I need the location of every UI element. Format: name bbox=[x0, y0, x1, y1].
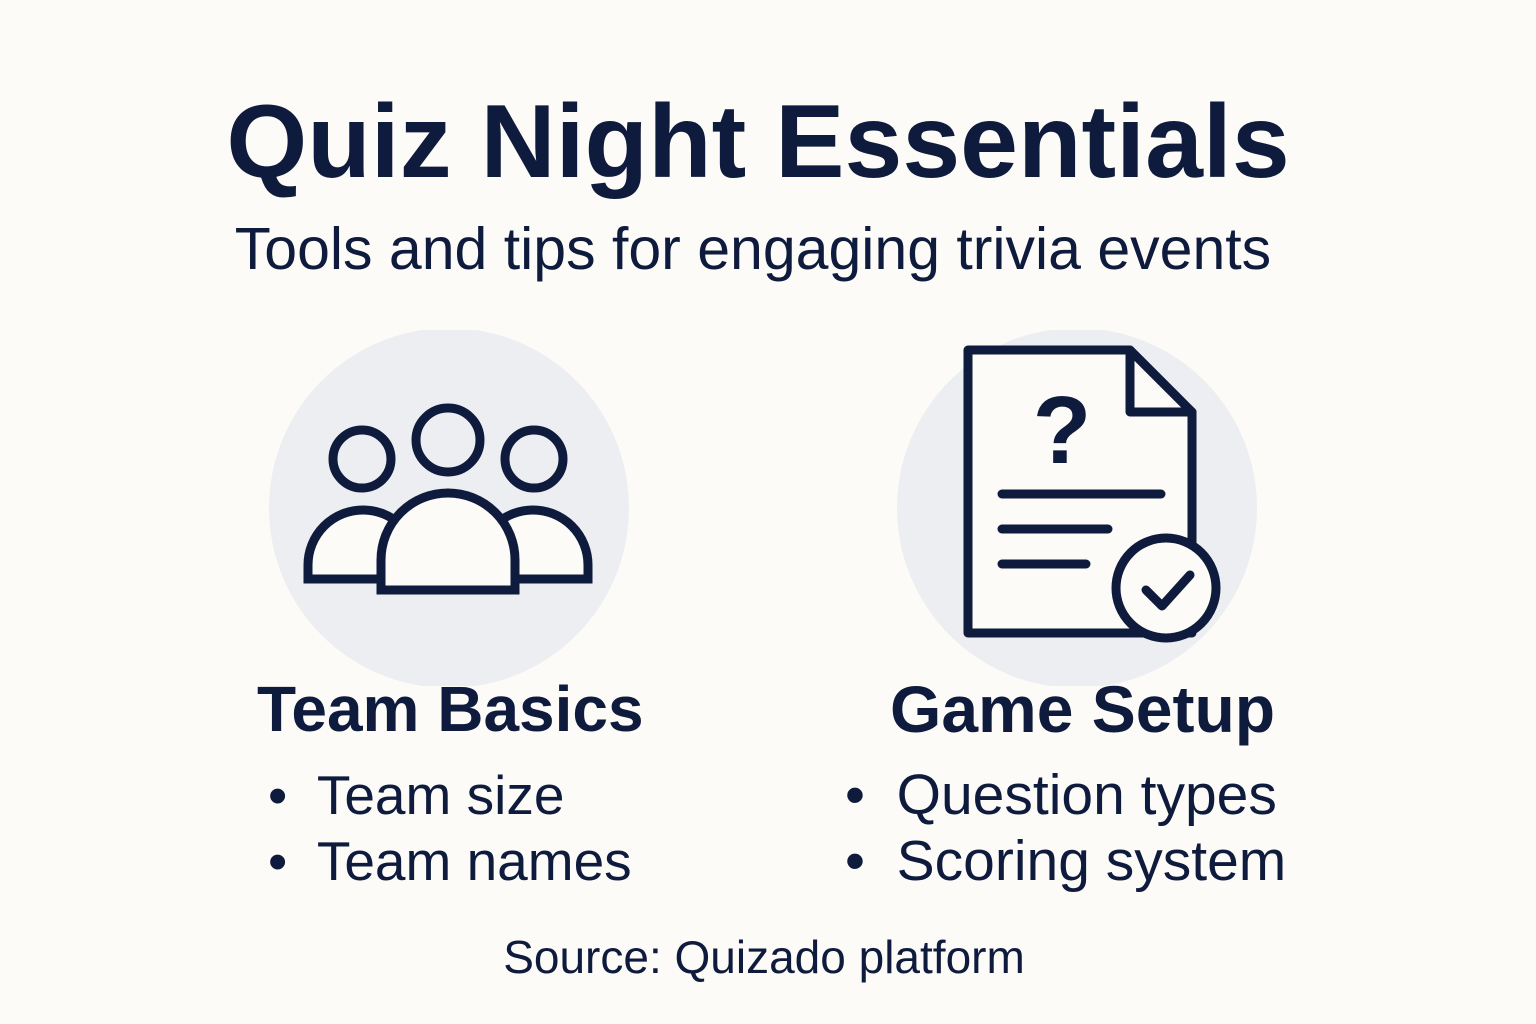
list: game bbox=[845, 763, 1286, 893]
list: team bbox=[268, 764, 632, 892]
list: game: • Question types bbox=[845, 763, 1277, 827]
heading: Game Setup: Game Setup bbox=[890, 672, 1275, 746]
icon: quiz sheet bbox=[897, 330, 1257, 686]
list: game: • Scoring system bbox=[845, 829, 1286, 893]
icon: team bbox=[269, 330, 629, 686]
list: team: • Team names bbox=[268, 830, 632, 892]
icon: quiz sheet: ? bbox=[1033, 377, 1091, 484]
list: team: • Team size bbox=[268, 764, 564, 826]
subtitle: Tools and tips for engaging trivia events bbox=[235, 216, 1271, 282]
title: Quiz Night Essentials bbox=[226, 84, 1290, 200]
heading: Team Basics: Team Basics bbox=[257, 673, 644, 745]
source: Source: Quizado platform bbox=[503, 931, 1025, 983]
